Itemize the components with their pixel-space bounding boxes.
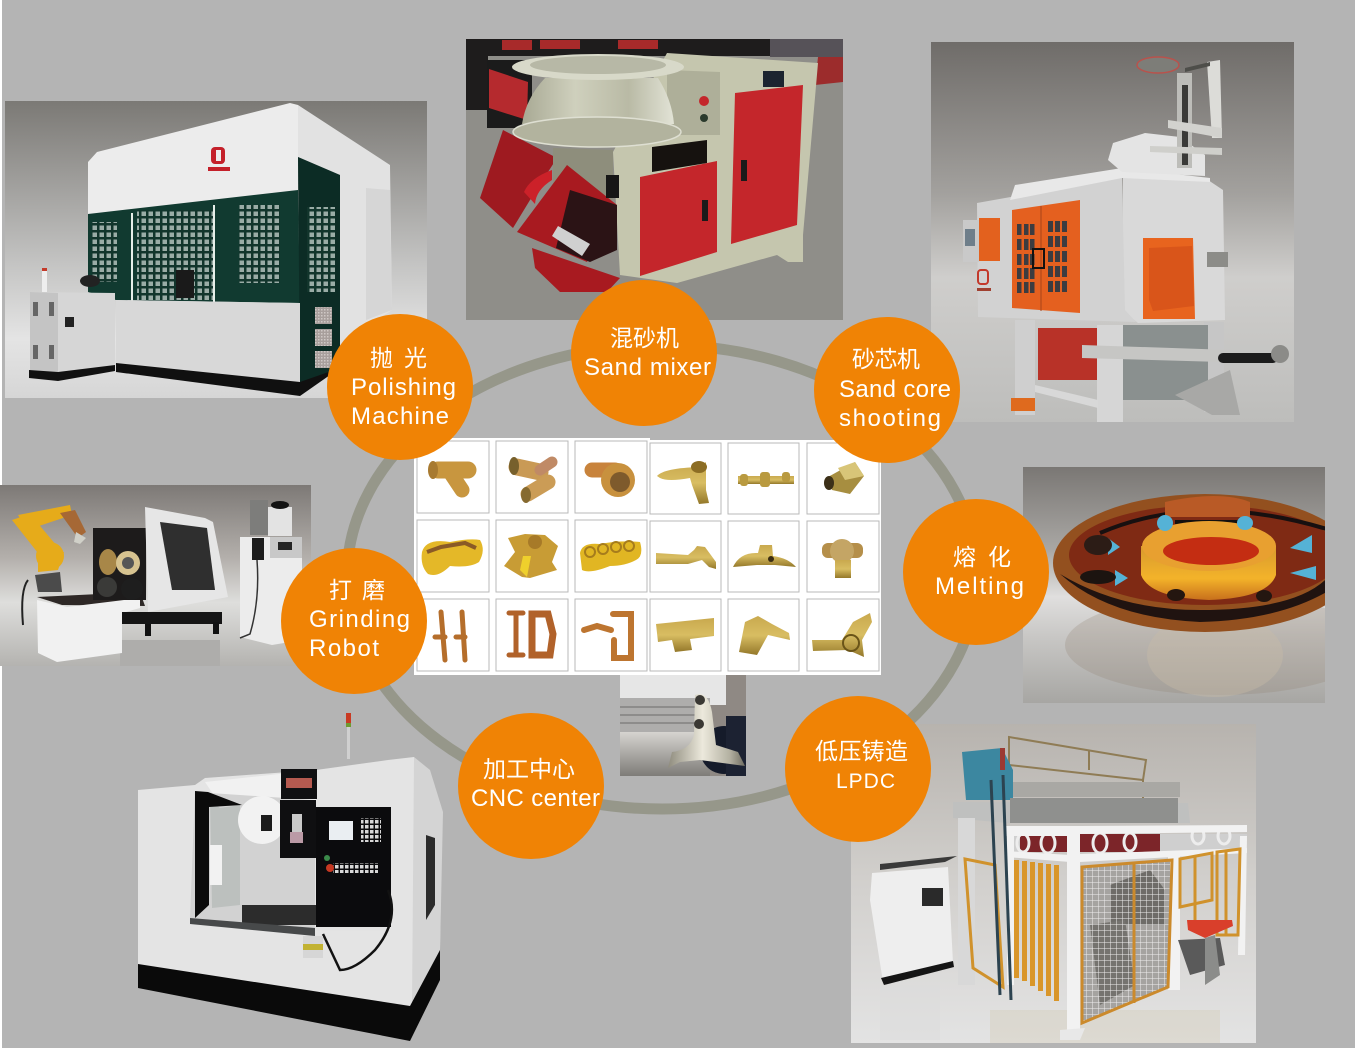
part: brass arm bbox=[657, 461, 709, 504]
part: tan elbow bbox=[592, 463, 635, 497]
sample cell outlines bbox=[417, 441, 879, 671]
photo: CNC machining center bbox=[138, 713, 443, 1041]
step: polishing machine: 抛 光 bbox=[370, 345, 427, 371]
part: brown frames bbox=[509, 613, 553, 655]
core machine hopper and column bbox=[1108, 57, 1222, 176]
LPDC mesh door bbox=[1082, 860, 1172, 1023]
part: brass T pipe bbox=[656, 618, 714, 652]
part: brass bent bbox=[739, 616, 790, 655]
step: sand core shooting: Sand core bbox=[839, 376, 951, 403]
LPDC control cabinet bbox=[870, 856, 957, 985]
process loop ring bbox=[347, 345, 977, 809]
photo: sand core shooting machine bbox=[931, 42, 1294, 422]
step: melting: 熔 化 bbox=[953, 544, 1011, 570]
core machine control panel bbox=[963, 218, 1000, 262]
grinding robot control unit bbox=[240, 500, 302, 645]
part: brass winged bbox=[733, 545, 796, 567]
panel: casting samples grid bbox=[414, 438, 881, 675]
photo: grinding robot bbox=[0, 485, 311, 666]
grinding machine enclosure bbox=[122, 507, 228, 636]
step: sand mixer bbox=[571, 280, 717, 426]
part: yellow flanged core bbox=[504, 534, 558, 578]
step: sand core shooting: 砂芯机 bbox=[852, 346, 920, 372]
step: sand core shooting: shooting bbox=[839, 405, 941, 432]
step: LPDC: 低压铸造 bbox=[815, 738, 908, 764]
step: LPDC: LPDC bbox=[836, 770, 895, 793]
grinding station table bbox=[37, 592, 145, 662]
LPDC railing bbox=[1009, 737, 1146, 800]
step: grinding robot: Grinding bbox=[309, 606, 410, 633]
step: sand mixer: Sand mixer bbox=[584, 354, 711, 381]
burner flames bbox=[1108, 515, 1316, 586]
photo: sand mixer bbox=[466, 39, 843, 320]
part: brass bar bbox=[738, 472, 794, 487]
photo: polishing machine bbox=[5, 101, 427, 398]
part: brown H castings bbox=[435, 612, 465, 660]
step: melting: Melting bbox=[935, 573, 1024, 600]
LPDC white frame bbox=[958, 818, 1247, 1035]
LPDC ladder bbox=[991, 775, 1011, 1000]
step: CNC center: CNC center bbox=[471, 785, 600, 812]
part: brass angled bbox=[812, 613, 872, 657]
part: brass faucet bbox=[656, 546, 716, 569]
core machine logo bbox=[977, 270, 991, 291]
part: tan twin pipe bbox=[509, 457, 552, 503]
part: bronze valve bbox=[822, 539, 863, 578]
step: LPDC bbox=[785, 696, 931, 842]
part: yellow dog-bone bbox=[422, 539, 483, 575]
LPDC orange slats bbox=[1014, 860, 1059, 1001]
polishing machine control cabinet bbox=[29, 268, 115, 381]
step: polishing machine: Machine bbox=[351, 403, 449, 430]
LPDC red tray bbox=[1178, 920, 1233, 985]
part: tan Y valve bbox=[428, 461, 468, 490]
step: CNC center: 加工中心 bbox=[483, 756, 575, 782]
photo: chrome casting close-up bbox=[620, 675, 748, 776]
core machine door windows bbox=[1017, 221, 1067, 293]
step: grinding robot bbox=[281, 548, 427, 694]
core machine legs and conveyor bbox=[1011, 320, 1290, 422]
step: grinding robot: Robot bbox=[309, 635, 379, 662]
part: brown lever bbox=[584, 614, 631, 658]
polishing machine logo bbox=[208, 147, 230, 171]
grinding wheels bbox=[93, 528, 146, 600]
grinding robot arm bbox=[12, 505, 86, 592]
photo: low pressure die casting machine bbox=[851, 724, 1256, 1043]
photo: melting furnace bbox=[1023, 467, 1355, 703]
step: sand mixer: 混砂机 bbox=[610, 325, 679, 351]
LPDC side orange panels bbox=[965, 849, 1240, 987]
step: melting bbox=[903, 499, 1049, 645]
step: polishing machine bbox=[327, 314, 473, 460]
part: brass hex valve bbox=[824, 462, 864, 494]
part: yellow plate bbox=[580, 541, 641, 571]
LPDC rings bbox=[1016, 832, 1232, 854]
step: grinding robot: 打 磨 bbox=[329, 577, 385, 603]
step: CNC center bbox=[458, 713, 604, 859]
step: sand core shooting bbox=[814, 317, 960, 463]
step: polishing machine: Polishing bbox=[351, 374, 456, 401]
